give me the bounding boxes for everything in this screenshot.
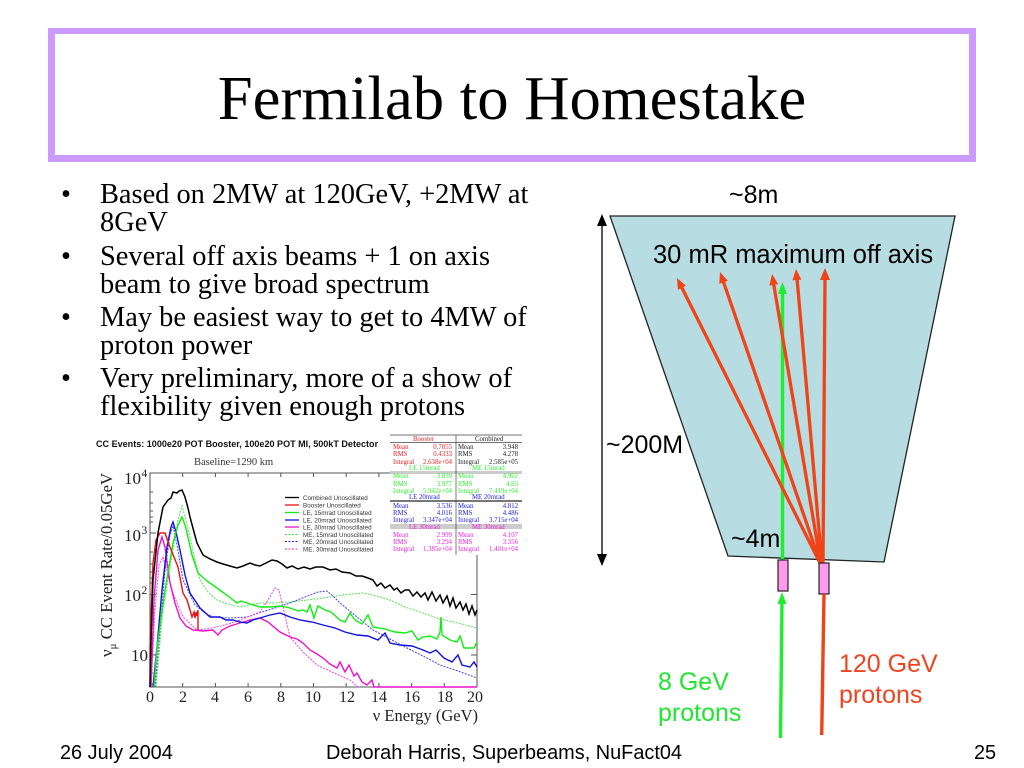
statistics table: Combined xyxy=(475,436,504,443)
curve: LE 30 xyxy=(151,537,477,687)
x axis labels: 4 xyxy=(211,689,219,706)
bullet 1 xyxy=(61,179,528,238)
statistics table: 4.107 xyxy=(503,532,519,539)
curve: ME 30 dashed xyxy=(151,557,358,687)
statistics table: RMS xyxy=(393,539,408,546)
footer author: Deborah Harris, Superbeams, NuFact04 xyxy=(326,742,682,764)
bullet 4: Very preliminary, more of a show of xyxy=(100,363,512,394)
y axis labels: 4 xyxy=(142,468,148,480)
baseline label: Baseline=1290 km xyxy=(194,457,273,468)
statistics table: 4.93 xyxy=(506,481,519,488)
x axis title: ν Energy (GeV) xyxy=(373,706,478,725)
x axis labels: 12 xyxy=(339,689,355,706)
x axis labels xyxy=(146,689,483,706)
statistics table: Integral xyxy=(393,517,414,524)
statistics table: Mean xyxy=(458,532,474,539)
x axis labels: 14 xyxy=(371,689,387,706)
statistics table: LE 30mrad xyxy=(409,524,440,531)
statistics table: 2.638e+04 xyxy=(423,459,453,466)
title: Fermilab to Homestake xyxy=(218,63,806,133)
red beams in region xyxy=(681,277,825,565)
statistics table: Booster xyxy=(413,436,435,443)
statistics table: 3.715e+04 xyxy=(489,517,519,524)
bullet 1: • xyxy=(61,179,71,210)
chart legend: ME, 30mrad Unoscillated xyxy=(303,546,374,554)
bullet 3: proton power xyxy=(100,330,252,361)
statistics table: ME 30mrad xyxy=(472,524,505,531)
y axis labels: 2 xyxy=(142,585,148,597)
statistics table: ME 15mrad xyxy=(472,465,505,472)
statistics table: 3.356 xyxy=(503,539,519,546)
statistics table: Mean xyxy=(393,473,409,480)
statistics table: 4.016 xyxy=(437,510,453,517)
x axis labels: 2 xyxy=(179,689,187,706)
statistics table: RMS xyxy=(393,481,408,488)
bullet 2: • xyxy=(61,241,71,272)
statistics table: Mean xyxy=(393,532,409,539)
chart legend xyxy=(285,495,374,554)
bullet 4: flexibility given enough protons xyxy=(100,391,465,422)
statistics table: 3.977 xyxy=(437,481,453,488)
x axis labels: 18 xyxy=(437,689,453,706)
statistics table: Integral xyxy=(393,459,414,466)
y axis labels xyxy=(124,468,148,665)
label: ~4m: ~4m xyxy=(731,525,780,553)
label: 8 GeV protons: 8 GeV xyxy=(658,668,729,696)
chart legend: LE, 20mrad Unoscillated xyxy=(303,518,372,524)
chart legend: LE, 15mrad Unoscillated xyxy=(303,510,372,517)
statistics table: LE 15mrad xyxy=(409,465,440,472)
bullet 1: 8GeV xyxy=(100,207,168,238)
statistics table: 3.347e+04 xyxy=(423,517,453,524)
footer page number: 25 xyxy=(974,742,996,764)
statistics table: 7.419e+04 xyxy=(489,488,519,495)
chart title: CC Events: 1000e20 POT Booster, 100e20 POT MI, 500kT Detector xyxy=(96,439,379,449)
y axis labels: 10 xyxy=(124,469,141,488)
x axis labels: 10 xyxy=(305,689,321,706)
statistics table: Integral xyxy=(393,546,414,553)
bullet 3 xyxy=(61,302,527,361)
statistics table: RMS xyxy=(393,451,408,458)
title panel xyxy=(48,28,976,162)
statistics table: 4.278 xyxy=(503,451,519,458)
y axis title: CC Event Rate/0.05GeV xyxy=(97,473,116,644)
statistics table: 0.4333 xyxy=(433,451,453,458)
statistics table: RMS xyxy=(458,481,473,488)
statistics table: RMS xyxy=(458,510,473,517)
label: ~200M: ~200M xyxy=(606,431,683,459)
statistics table: 2.585e+05 xyxy=(489,459,519,466)
target: 120 GeV xyxy=(819,563,829,594)
statistics table: LE 20mrad xyxy=(409,494,440,501)
y axis title: ν xyxy=(97,649,116,657)
statistics table: 1.401e+04 xyxy=(489,546,519,553)
statistics table: RMS xyxy=(458,539,473,546)
statistics table: ME 20mrad xyxy=(472,494,505,501)
chart legend: ME, 15mrad Unoscillated xyxy=(303,532,374,539)
chart legend: Combined Unoscillated xyxy=(303,495,368,502)
curve: booster xyxy=(150,533,198,687)
y axis labels: 10 xyxy=(124,586,141,605)
curve: ME 20 dashed xyxy=(155,526,477,687)
statistics table: Integral xyxy=(458,459,479,466)
curve: ME 15 dashed xyxy=(156,506,477,687)
red arrowheads xyxy=(673,268,830,290)
statistics table: 3.948 xyxy=(503,444,519,451)
fan-shaped region xyxy=(610,216,955,562)
statistics table: 4.812 xyxy=(503,503,519,510)
statistics table: 2.999 xyxy=(437,532,453,539)
x axis labels: 8 xyxy=(277,689,285,706)
statistics table: 3.536 xyxy=(437,503,453,510)
statistics table: 3.839 xyxy=(437,473,453,480)
statistics table: Mean xyxy=(458,444,474,451)
statistics table: Integral xyxy=(458,488,479,495)
y axis labels: 10 xyxy=(131,646,148,665)
beam diagram xyxy=(597,214,955,738)
statistics table: Mean xyxy=(458,473,474,480)
x axis labels: 0 xyxy=(146,689,154,706)
statistics table: Mean xyxy=(393,503,409,510)
statistics table: RMS xyxy=(458,451,473,458)
statistics table: Mean xyxy=(393,444,409,451)
label: 8 GeV protons xyxy=(658,668,741,726)
bullet 2: beam to give broad spectrum xyxy=(100,269,430,300)
statistics table xyxy=(390,435,522,555)
label: 8 GeV protons: protons xyxy=(658,698,741,726)
bullet 3: • xyxy=(61,302,71,333)
bullet 1: Based on 2MW at 120GeV, +2MW at xyxy=(100,179,528,210)
target: 8 GeV xyxy=(778,560,788,591)
statistics table: Integral xyxy=(458,517,479,524)
green beam in region xyxy=(778,282,787,562)
chart legend: ME, 20mrad Unoscillated xyxy=(303,539,374,546)
statistics table: Integral xyxy=(458,546,479,553)
statistics table: Mean xyxy=(458,503,474,510)
y axis labels: 3 xyxy=(142,525,148,537)
plot frame xyxy=(150,473,477,687)
curve: combined xyxy=(150,490,477,687)
footer date: 26 July 2004 xyxy=(60,742,173,764)
statistics table: 5.942e+04 xyxy=(423,488,453,495)
chart legend: Booster Unoscillated xyxy=(303,502,361,510)
statistics table: 3.294 xyxy=(437,539,453,546)
x axis labels: 16 xyxy=(404,689,420,706)
bullet 2 xyxy=(61,241,490,300)
bullet 3: May be easiest way to get to 4MW of xyxy=(100,302,527,333)
bullet 4: • xyxy=(61,363,71,394)
height arrow xyxy=(597,214,607,566)
curve: LE 20 xyxy=(153,522,477,687)
statistics table: RMS xyxy=(393,510,408,517)
x axis labels: 20 xyxy=(467,689,483,706)
curve: LE 15 xyxy=(154,517,477,687)
statistics table: 4.486 xyxy=(503,510,519,517)
statistics table: 4.962 xyxy=(503,473,519,480)
label: 120 GeV protons xyxy=(839,650,938,708)
label: 30 mR maximum off axis: 30 mR maximum off axis xyxy=(653,241,933,269)
statistics table: Integral xyxy=(393,488,414,495)
label: ~8m: ~8m xyxy=(729,181,778,209)
chart legend: LE, 30mrad Unoscillated xyxy=(303,524,372,532)
red incoming proton line xyxy=(822,594,824,735)
y axis title: μ xyxy=(107,643,119,649)
statistics table: 0.7055 xyxy=(433,444,453,451)
statistics table: 1.385e+04 xyxy=(423,546,453,553)
bullet 4 xyxy=(61,363,512,422)
x axis labels: 6 xyxy=(244,689,252,706)
bullet 2: Several off axis beams + 1 on axis xyxy=(100,241,490,272)
y axis labels: 10 xyxy=(124,526,141,545)
bullet list xyxy=(61,179,528,422)
label: 120 GeV protons: protons xyxy=(839,680,922,708)
green incoming proton arrow xyxy=(778,592,786,738)
label: 120 GeV protons: 120 GeV xyxy=(839,650,938,678)
